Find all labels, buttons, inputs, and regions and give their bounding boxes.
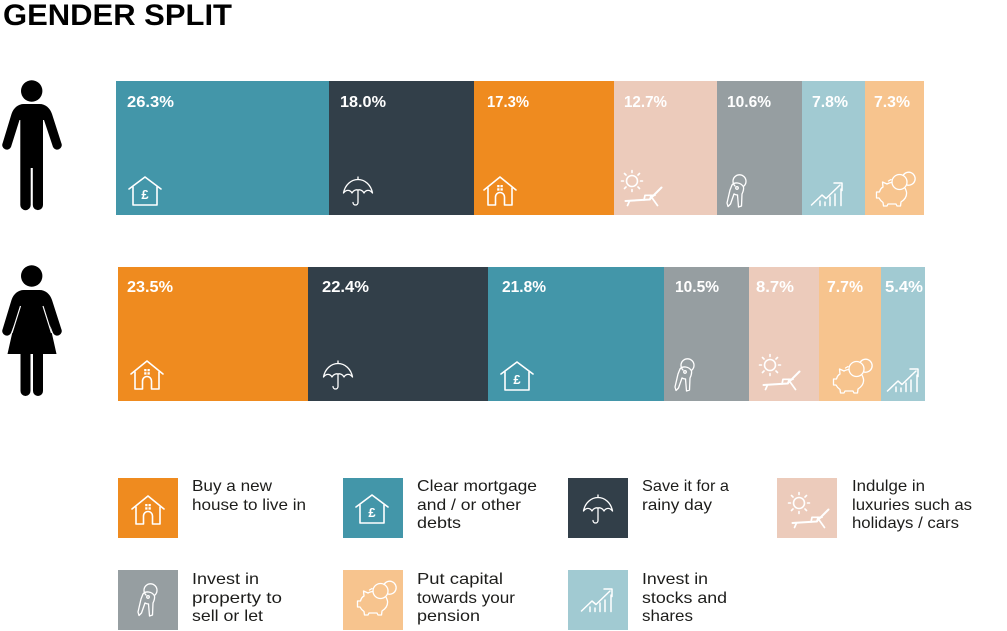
legend item: pension: Put capital (417, 571, 503, 588)
segment: stocks 7.8%: 7.8% (812, 94, 848, 111)
segment: property 10.6% (717, 81, 802, 215)
legend item: property (118, 570, 282, 630)
legend item: clear mortgage: Clear mortgage (417, 478, 537, 495)
legend item: property: property to (192, 590, 282, 607)
segment: clear mortgage 21.8%: £ (513, 372, 521, 387)
segment: new house 17.3% (474, 81, 614, 215)
segment: luxuries 8.7% (749, 267, 819, 401)
segment: stocks 5.4% (881, 267, 925, 401)
legend item: stocks (568, 570, 727, 630)
legend item: buy a new house: Buy a new (192, 478, 272, 495)
legend item: property: Invest in (192, 571, 259, 588)
legend item: buy a new house (118, 478, 306, 538)
legend item: clear mortgage: debts (417, 515, 461, 532)
legend item: luxuries: Indulge in (852, 478, 925, 495)
legend item: stocks: stocks and (642, 590, 727, 607)
segment: new house 23.5%: 23.5% (127, 279, 173, 296)
segment: new house 23.5% (118, 267, 308, 401)
segment: rainy day 22.4% (308, 267, 488, 401)
segment: rainy day 22.4%: 22.4% (322, 279, 369, 296)
legend item: stocks: shares (642, 608, 693, 625)
segment: rainy day 18.0%: 18.0% (340, 94, 386, 111)
stacked bar: women (118, 267, 925, 401)
segment: pension 7.3% (865, 81, 924, 215)
segment: pension 7.7%: 7.7% (827, 279, 863, 296)
segment: stocks 7.8% (802, 81, 865, 215)
stacked bar: men (116, 81, 924, 215)
segment: property 10.5%: 10.5% (675, 279, 719, 296)
segment: property 10.5% (664, 267, 749, 401)
segment: luxuries 8.7%: 8.7% (756, 279, 794, 296)
legend item: pension: towards your (417, 590, 516, 607)
segment: stocks 5.4%: 5.4% (885, 279, 923, 296)
legend item: buy a new house: house to live in (192, 497, 306, 514)
legend item: luxuries: holidays / cars (852, 515, 959, 532)
segment: pension 7.7% (819, 267, 881, 401)
icon: male figure (2, 80, 62, 210)
legend item: pension (343, 570, 516, 630)
legend item: pension: pension (417, 608, 480, 625)
legend item: luxuries (777, 478, 972, 538)
segment: luxuries 12.7%: 12.7% (624, 94, 667, 111)
legend item: rainy day: rainy day (642, 497, 712, 514)
segment: luxuries 12.7% (614, 81, 717, 215)
legend item: clear mortgage: £ (368, 505, 376, 520)
segment: clear mortgage 26.3%: £ (141, 187, 149, 202)
legend item: clear mortgage: and / or other (417, 497, 522, 514)
segment: rainy day 18.0% (329, 81, 474, 215)
legend item: rainy day (568, 478, 729, 538)
segment: pension 7.3%: 7.3% (874, 94, 910, 111)
segment: new house 17.3%: 17.3% (487, 94, 529, 111)
legend item: stocks: Invest in (642, 571, 708, 588)
segment: clear mortgage 26.3%: 26.3% (127, 94, 174, 111)
icon: female figure (2, 265, 62, 396)
segment: clear mortgage 21.8% (488, 267, 664, 401)
segment: property 10.6%: 10.6% (727, 94, 771, 111)
legend item: luxuries: luxuries such as (852, 497, 972, 514)
legend item: property: sell or let (192, 608, 264, 625)
legend (118, 478, 972, 630)
segment: clear mortgage 21.8%: 21.8% (502, 279, 546, 296)
legend item: clear mortgage (343, 478, 537, 538)
legend item: rainy day: Save it for a (642, 478, 729, 495)
segment: clear mortgage 26.3% (116, 81, 329, 215)
